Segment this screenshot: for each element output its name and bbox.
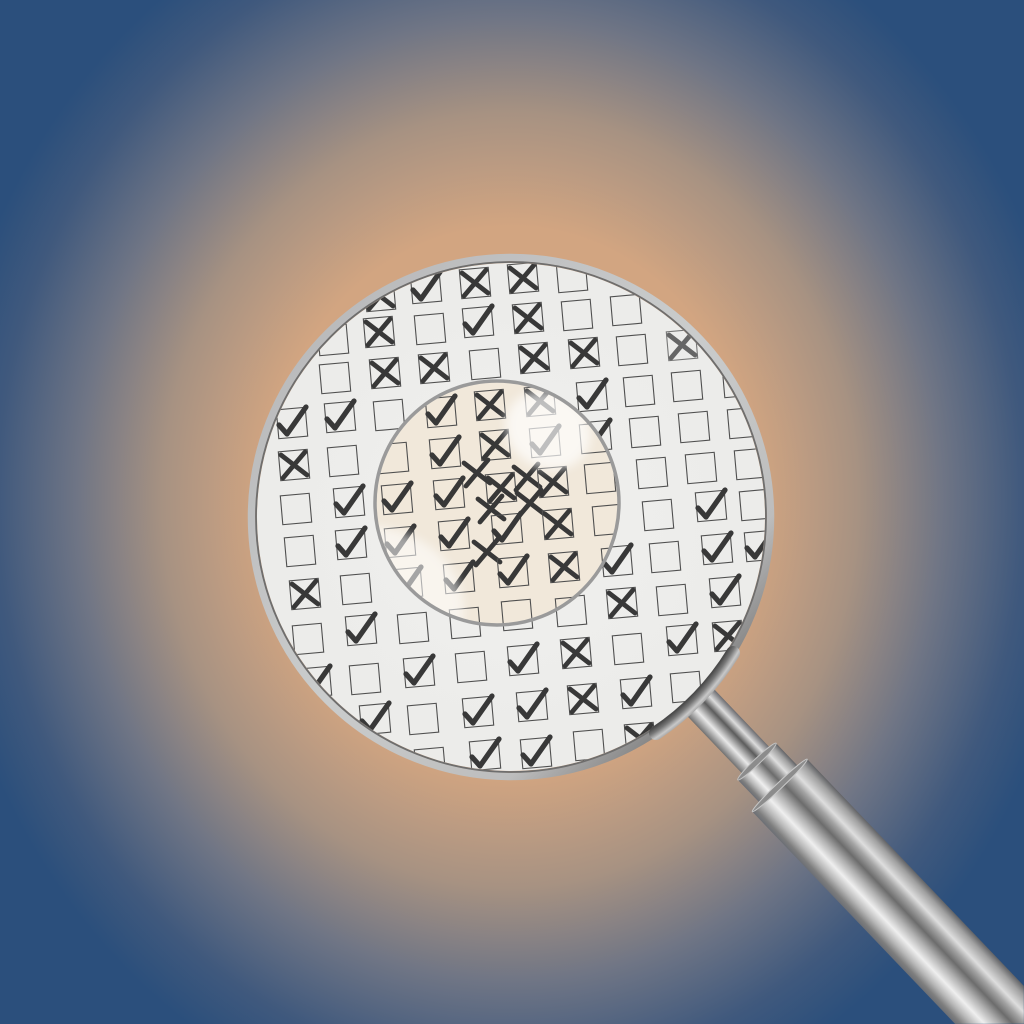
handle collar on rim xyxy=(656,653,733,733)
inner lens glare: upper right xyxy=(500,387,593,476)
inner lens: magnified cluster of marks xyxy=(373,379,621,627)
inner lens glare: lower left xyxy=(380,526,470,618)
checkbox grid seen through the lens xyxy=(276,261,776,779)
handle: thick grip xyxy=(750,757,1024,1024)
inner lens marks xyxy=(380,387,618,624)
lens rim xyxy=(252,258,770,776)
handle: thin neck xyxy=(683,686,774,778)
lens: outer checklist paper xyxy=(255,261,776,779)
magnifying glass handle xyxy=(669,672,1024,1024)
handle: middle collar xyxy=(736,741,804,809)
